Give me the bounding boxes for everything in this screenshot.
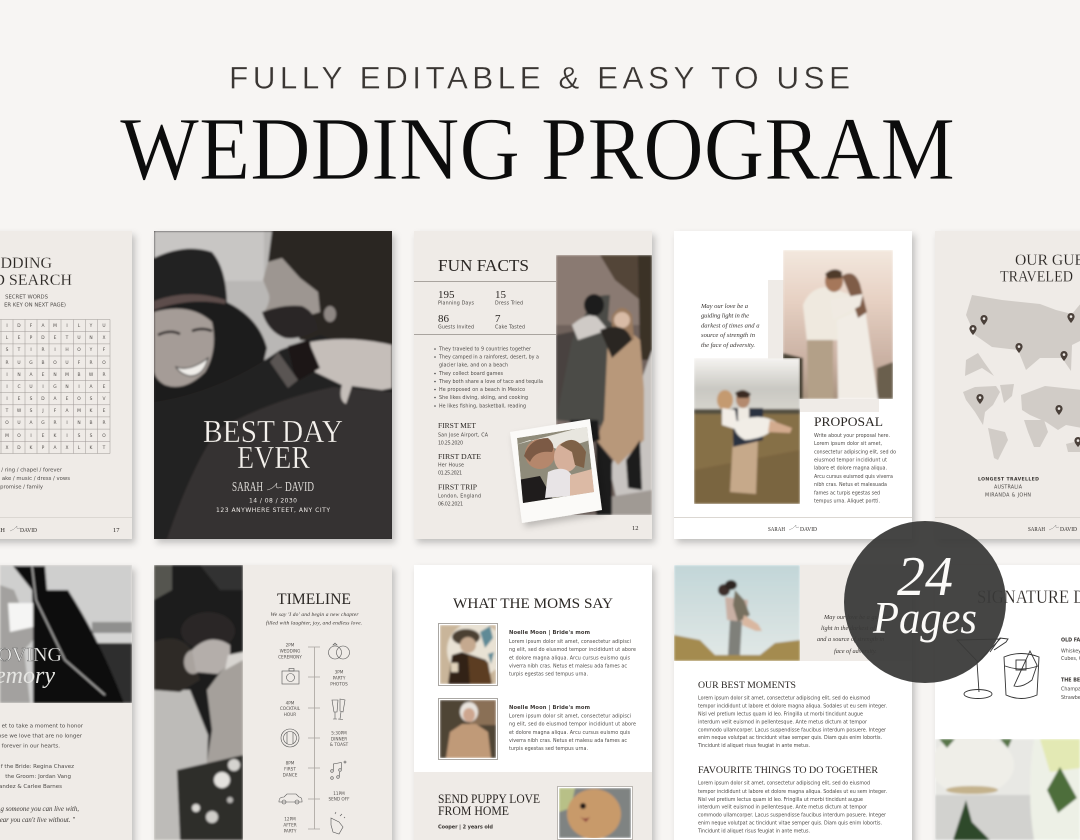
word search grid: O bbox=[77, 396, 81, 402]
couple photo bbox=[556, 255, 652, 515]
best moments text: Lorem ipsum dolor sit amet, consectetur adipiscing elit, sed do eiusmod bbox=[698, 696, 870, 702]
memorial title bbox=[0, 644, 62, 689]
word search grid: U bbox=[77, 335, 81, 341]
word search grid: U bbox=[29, 384, 33, 390]
word search grid: W bbox=[89, 372, 94, 378]
field couple photo bbox=[694, 358, 800, 504]
proposal text bbox=[814, 414, 896, 504]
word list: promise / family bbox=[0, 484, 43, 490]
word search grid: H bbox=[65, 347, 69, 353]
word search grid: E bbox=[42, 433, 45, 439]
best moments text: OUR BEST MOMENTS bbox=[698, 680, 796, 690]
stats: 195 bbox=[438, 289, 455, 301]
longest travelled text: LONGEST TRAVELLED bbox=[978, 476, 1039, 482]
fun facts heading: FUN FACTS bbox=[438, 256, 529, 275]
memorial text: ear you can't live without. " bbox=[0, 817, 75, 824]
favourite things text bbox=[697, 765, 887, 834]
header bbox=[120, 60, 955, 199]
proposal text: labore et dolore magna aliqua. bbox=[814, 466, 887, 472]
word search grid: E bbox=[103, 384, 106, 390]
mom photo 2 bbox=[438, 698, 498, 760]
word search grid: E bbox=[42, 372, 45, 378]
word search grid: I bbox=[6, 384, 8, 390]
quote: the face of adversity. bbox=[701, 342, 755, 349]
mom quote 1: et dolore magna aliqua. Arcu cursus euismo quis bbox=[509, 656, 630, 662]
quote: darkest of times and a bbox=[701, 322, 760, 330]
icon: martini glass bbox=[957, 638, 1008, 698]
word search grid: A bbox=[53, 445, 57, 451]
stats: 86 bbox=[438, 313, 450, 325]
word search grid: R bbox=[102, 420, 106, 426]
word search heading: SECRET WORDS bbox=[5, 294, 49, 300]
favourite things text: tempor incididunt ut labore et dolore magna aliqua. Sodales ut eu sem integer. bbox=[698, 789, 887, 795]
word search grid: F bbox=[103, 347, 106, 353]
longest travelled text bbox=[978, 476, 1039, 498]
timeline labels right: 5:30PM bbox=[331, 730, 347, 736]
timeline labels right: & TOAST bbox=[330, 742, 349, 747]
word search grid: O bbox=[102, 360, 106, 366]
panel: word search page bbox=[0, 231, 132, 539]
proposal text: fames ac turpis egestas sed bbox=[814, 490, 880, 496]
word search grid: U bbox=[17, 360, 21, 366]
word search grid: I bbox=[6, 396, 8, 402]
proposal text: PROPOSAL bbox=[814, 414, 883, 429]
proposal text: Write about your proposal here. bbox=[814, 433, 890, 439]
mom quote 2 bbox=[509, 705, 636, 752]
word search grid: I bbox=[66, 420, 68, 426]
panel: timeline page bbox=[154, 565, 392, 840]
footer: 17 bbox=[113, 527, 120, 534]
panel: proposal page bbox=[674, 231, 912, 539]
word search grid: X bbox=[102, 335, 106, 341]
word search grid: T bbox=[65, 335, 69, 341]
footer bbox=[0, 517, 132, 534]
first moments: 01.25.2021 bbox=[438, 470, 462, 476]
longest travelled text: MIRANDA & JOHN bbox=[985, 492, 1031, 498]
word search grid: P bbox=[42, 445, 45, 451]
couple jump photo bbox=[674, 565, 800, 661]
word search grid: X bbox=[5, 445, 9, 451]
word search grid: O bbox=[17, 433, 21, 439]
word search grid: M bbox=[5, 433, 9, 439]
word search grid: A bbox=[29, 420, 33, 426]
cover text: SARAH bbox=[232, 480, 263, 495]
timeline labels right: 3PM bbox=[335, 670, 344, 674]
footer bbox=[674, 517, 912, 533]
bullet list: They collect board games bbox=[438, 371, 504, 377]
timeline heading: filled with laughter, joy, and endless love. bbox=[266, 620, 362, 626]
timeline labels left: 4PM bbox=[286, 700, 295, 706]
word search grid: O bbox=[5, 420, 9, 426]
mom quote 1: Noelle Moon | Bride's mom bbox=[509, 630, 590, 636]
polaroid bbox=[510, 419, 602, 523]
footer: SARAH bbox=[768, 526, 785, 533]
bullet list: glacier lake, and on a beach bbox=[439, 362, 508, 368]
word search grid: A bbox=[41, 323, 45, 329]
memorial text: et to take a moment to honor bbox=[2, 724, 84, 730]
badge: 24 pages bbox=[844, 521, 1006, 683]
mom quote 2: et dolore magna aliqua. Arcu cursus euismo quis bbox=[509, 730, 630, 736]
word search grid: K bbox=[90, 445, 93, 451]
timeline heading: We say 'I do' and begin a new chapter bbox=[270, 612, 359, 618]
mom quote 2: viverra nibh cras. Netus et malesu ada fames ac bbox=[509, 738, 627, 744]
timeline labels left bbox=[278, 642, 302, 834]
word search grid: S bbox=[90, 433, 93, 439]
bullet list: He proposed on a beach in Mexico bbox=[439, 387, 525, 393]
word search grid: V bbox=[102, 396, 106, 402]
word search grid: N bbox=[17, 372, 21, 378]
mom quote 2: turpis egestas sed tempus urna. bbox=[509, 746, 588, 752]
stats: Cake Tasted bbox=[495, 324, 525, 330]
word search grid: I bbox=[66, 323, 68, 329]
memorial text: the Groom: Jordan Vang bbox=[5, 774, 71, 780]
mom quote 2: Lorem ipsum dolor sit amet, consectetur adipisci bbox=[509, 714, 631, 720]
beige panel quote: and a source of strength in bbox=[817, 636, 884, 643]
word search grid: W bbox=[17, 408, 22, 414]
first moments bbox=[438, 421, 489, 508]
page number: 12 bbox=[632, 525, 638, 532]
mom quote 2: Noelle Moon | Bride's mom bbox=[509, 705, 590, 711]
stats: 15 bbox=[495, 289, 506, 301]
word search grid: X bbox=[65, 445, 69, 451]
best moments text: Tincidunt id aliquet risus feugiat in ante metus. bbox=[697, 743, 810, 749]
panel: best moments page bbox=[674, 565, 912, 840]
first moments: FIRST DATE bbox=[438, 452, 481, 461]
word search grid: N bbox=[53, 372, 57, 378]
best moments text: enim neque volutpat ac tincidunt vitae semper quis. Diam quis enim lobortis. bbox=[698, 735, 882, 741]
timeline labels right: PHOTOS bbox=[330, 682, 348, 686]
proposal text: consectetur adipiscing elit, sed do bbox=[814, 450, 896, 456]
beige panel quote: light in the darkest of bbox=[821, 625, 876, 632]
icon: camera bbox=[282, 668, 299, 684]
word search grid: D bbox=[17, 323, 21, 329]
word search grid: T bbox=[5, 408, 9, 414]
badge: 24 pages: 24 bbox=[897, 546, 953, 608]
word list: ake / music / dress / vows bbox=[2, 476, 70, 482]
quote: May our love be a bbox=[700, 303, 749, 310]
icon: whiskey glass bbox=[1004, 651, 1039, 698]
word search grid: E bbox=[54, 335, 57, 341]
quote: source of strength in bbox=[701, 332, 756, 339]
panel: fun facts page bbox=[414, 231, 652, 539]
timeline labels right: SEND OFF bbox=[328, 796, 350, 802]
timeline labels left: 12PM bbox=[284, 816, 296, 822]
panel: in loving memory page bbox=[0, 565, 132, 840]
word search grid: N bbox=[77, 420, 81, 426]
word search grid: D bbox=[17, 445, 21, 451]
beige panel quote bbox=[817, 614, 891, 655]
word search grid: B bbox=[77, 372, 81, 378]
timeline labels left: AFTER bbox=[283, 822, 297, 828]
drink descriptions bbox=[1061, 638, 1080, 701]
cover text: EVER bbox=[237, 439, 311, 475]
word search grid: R bbox=[41, 347, 45, 353]
word search grid: B bbox=[41, 360, 45, 366]
mom quote 1 bbox=[509, 630, 636, 678]
mom quote 1: Lorem ipsum dolor sit amet, consectetur adipisci bbox=[509, 639, 631, 645]
timeline labels left: 2PM bbox=[286, 642, 295, 648]
word search grid: S bbox=[78, 433, 81, 439]
word search grid: I bbox=[42, 384, 44, 390]
footer: DAVID bbox=[20, 527, 37, 534]
word search grid: O bbox=[102, 433, 106, 439]
proposal text: Arcu cursus euismod quis viverra bbox=[814, 474, 893, 480]
word search grid: D bbox=[41, 335, 45, 341]
word search grid: C bbox=[17, 384, 21, 390]
panel: signature drinks page bbox=[930, 565, 1080, 840]
cocktail photo bbox=[930, 735, 1080, 840]
sunset couple photo bbox=[783, 250, 893, 399]
word search grid: G bbox=[41, 420, 45, 426]
memorial text: f the Bride: Regina Chavez bbox=[1, 764, 74, 770]
first moments: London, England bbox=[438, 494, 481, 500]
word search grid: K bbox=[54, 433, 57, 439]
timeline labels left: FIRST bbox=[284, 766, 296, 772]
guests heading: TRAVELED bbox=[1000, 268, 1073, 286]
word search grid: R bbox=[5, 360, 9, 366]
panel: cover page Best Day Ever bbox=[154, 231, 392, 539]
beige panel quote: May our love be a guiding bbox=[823, 614, 891, 621]
best moments text: commodo ullamcorper. Lacus suspendisse faucibus interdum posuere. Integer bbox=[698, 728, 886, 734]
word search grid: K bbox=[90, 408, 93, 414]
longest travelled text: AUSTRALIA bbox=[994, 484, 1023, 490]
timeline labels right: DINNER bbox=[331, 736, 347, 742]
word search grid: J bbox=[41, 408, 44, 414]
word search grid: F bbox=[30, 323, 33, 329]
first moments: Her House bbox=[438, 462, 464, 468]
word search grid: S bbox=[90, 396, 93, 402]
map: world bbox=[963, 384, 1080, 460]
quote bbox=[700, 303, 760, 349]
favourite things text: Nisl vel pretium lectus quam id leo. Fringilla ut morbi tincidunt augue bbox=[698, 797, 863, 803]
best moments text bbox=[697, 680, 887, 749]
word search grid: D bbox=[41, 396, 45, 402]
word search grid: Y bbox=[89, 323, 93, 329]
subtitle: FULLY EDITABLE & EASY TO USE bbox=[229, 60, 850, 96]
word search grid: T bbox=[102, 445, 106, 451]
bullet list: He likes fishing, basketball, reading bbox=[439, 404, 526, 410]
stats: 7 bbox=[495, 313, 501, 325]
word list: / ring / chapel / forever bbox=[1, 468, 63, 474]
timeline labels left: PARTY bbox=[284, 828, 297, 834]
badge: 24 pages: Pages bbox=[872, 592, 977, 643]
map pins bbox=[969, 313, 1080, 447]
word list bbox=[0, 468, 70, 490]
icon: confetti bottle bbox=[331, 812, 345, 834]
map: united states bbox=[965, 295, 1080, 376]
timeline labels left: WEDDING bbox=[280, 648, 300, 654]
panel: guests traveled page bbox=[935, 231, 1080, 539]
word search grid: I bbox=[66, 433, 68, 439]
cover text: BEST DAY bbox=[203, 413, 343, 449]
timeline labels right: 11PM bbox=[333, 791, 345, 796]
puppy section: Cooper | 2 years old bbox=[438, 824, 493, 830]
word search grid: E bbox=[66, 396, 69, 402]
first moments: 10.25.2020 bbox=[438, 440, 463, 446]
icon: music notes bbox=[331, 761, 346, 779]
stats: Guests Invited bbox=[438, 324, 474, 330]
word search grid: R bbox=[53, 420, 57, 426]
timeline labels left: COCKTAIL bbox=[280, 706, 301, 711]
memorial text bbox=[0, 724, 84, 824]
word search grid: U bbox=[17, 420, 21, 426]
puppy section: SEND PUPPY LOVE bbox=[438, 792, 540, 806]
word search grid: O bbox=[53, 360, 57, 366]
footer bbox=[935, 517, 1080, 533]
cover text bbox=[203, 413, 343, 514]
footer: SARAH bbox=[1028, 526, 1045, 533]
footer: DAVID bbox=[800, 526, 817, 533]
bullet list: She likes diving, skiing, and cooking bbox=[439, 395, 528, 401]
word search grid: K bbox=[30, 445, 33, 451]
bullet list: They traveled to 9 countries together bbox=[438, 346, 531, 352]
word search grid: A bbox=[89, 384, 93, 390]
word search grid: S bbox=[6, 347, 9, 353]
puppy section: FROM HOME bbox=[438, 804, 509, 818]
word search grid: Y bbox=[89, 347, 93, 353]
timeline labels left: CEREMONY bbox=[278, 654, 302, 660]
best moments text: interdum velit euismod in pellentesque. Ante metus dictum at tempor bbox=[698, 720, 867, 726]
timeline heading bbox=[266, 591, 362, 626]
beige panel quote: face of adversity. bbox=[834, 648, 877, 655]
word search grid: L bbox=[6, 335, 9, 341]
word search grid: B bbox=[89, 420, 93, 426]
word search grid: I bbox=[54, 347, 56, 353]
puppy section bbox=[414, 772, 652, 840]
word search grid: S bbox=[30, 396, 33, 402]
bullet list: They both share a love of taco and tequila bbox=[438, 379, 543, 385]
favourite things text: Tincidunt id aliquet risus feugiat in ante metus. bbox=[697, 828, 810, 834]
word search grid: E bbox=[103, 408, 106, 414]
word search grid: U bbox=[102, 323, 106, 329]
word search grid: L bbox=[78, 323, 81, 329]
wedding couple photo bbox=[154, 565, 243, 840]
word search heading bbox=[0, 255, 72, 308]
cover photo bbox=[154, 231, 392, 539]
panel: what the moms say page bbox=[414, 565, 652, 840]
favourite things text: FAVOURITE THINGS TO DO TOGETHER bbox=[698, 765, 878, 775]
best moments text: tempor incididunt ut labore et dolore magna aliqua. Sodales ut eu sem integer. bbox=[698, 704, 887, 710]
word search grid: A bbox=[53, 396, 57, 402]
word search grid: N bbox=[89, 335, 93, 341]
memorial text: ose we love that are no longer bbox=[0, 734, 83, 740]
word search grid: L bbox=[78, 445, 81, 451]
first moments: FIRST TRIP bbox=[438, 482, 478, 492]
moms heading: WHAT THE MOMS SAY bbox=[453, 596, 614, 612]
beige accent blocks bbox=[768, 280, 879, 412]
word search grid: R bbox=[89, 360, 93, 366]
timeline labels right bbox=[328, 670, 350, 802]
word search grid: F bbox=[54, 408, 57, 414]
mom quote 2: ng elit, sed do eiusmod tempor incididunt ut abore bbox=[509, 722, 636, 728]
word search grid: A bbox=[29, 372, 33, 378]
timeline labels left: 8PM bbox=[286, 760, 295, 766]
cover text: DAVID bbox=[285, 480, 314, 495]
word search grid: I bbox=[6, 323, 8, 329]
word search grid: M bbox=[65, 372, 69, 378]
first moments: 06.02.2021 bbox=[438, 502, 463, 508]
timeline labels left: DANCE bbox=[283, 772, 298, 778]
footer: DAVID bbox=[1060, 526, 1077, 533]
proposal text: Lorem ipsum dolor sit amet, bbox=[814, 441, 882, 447]
word search grid: I bbox=[6, 372, 8, 378]
mom quote 1: turpis egestas sed tempus urna. bbox=[509, 672, 588, 678]
memorial photo bbox=[0, 565, 132, 703]
word search grid: S bbox=[30, 408, 33, 414]
word search grid: G bbox=[53, 384, 57, 390]
puppy photo bbox=[559, 788, 631, 839]
stats bbox=[414, 281, 556, 335]
cover text: 123 ANYWHERE STEET, ANY CITY bbox=[216, 507, 330, 514]
word search grid: E bbox=[18, 396, 21, 402]
word search grid: I bbox=[30, 433, 32, 439]
word search grid: G bbox=[29, 360, 33, 366]
mom photo 1 bbox=[438, 622, 503, 686]
favourite things text: Lorem ipsum dolor sit amet, consectetur adipiscing elit, sed do eiusmod bbox=[698, 780, 870, 786]
word search grid: M bbox=[53, 323, 57, 329]
bullet list bbox=[434, 346, 543, 410]
word search grid: U bbox=[65, 360, 69, 366]
word search grid: N bbox=[65, 384, 69, 390]
icon: rings bbox=[328, 643, 350, 659]
cover text: 14 / 08 / 2030 bbox=[249, 498, 297, 504]
proposal text: eiusmod tempor incididunt ut bbox=[814, 458, 887, 464]
word search grid: P bbox=[30, 335, 33, 341]
word search grid: A bbox=[65, 408, 69, 414]
word search grid: M bbox=[77, 408, 81, 414]
word search grid: E bbox=[18, 335, 21, 341]
guests heading bbox=[1000, 252, 1080, 286]
bullet list: They camped in a rainforest, desert, by a bbox=[438, 354, 539, 360]
proposal text: nibh cras. Netus et malesuada bbox=[814, 482, 887, 488]
stats: Planning Days bbox=[438, 300, 474, 306]
word search grid: O bbox=[77, 347, 81, 353]
timeline labels left: HOUR bbox=[284, 712, 296, 717]
memorial text: andez & Carlee Barnes bbox=[0, 784, 62, 790]
icon: plate and cutlery bbox=[281, 729, 299, 747]
memorial text: g someone you can live with, bbox=[0, 806, 79, 813]
word search grid: R bbox=[102, 372, 106, 378]
word search grid: F bbox=[78, 360, 81, 366]
mom quote 1: viverra nibh cras. Netus et malesu ada fames ac bbox=[509, 664, 627, 670]
word search grid: T bbox=[17, 347, 21, 353]
timeline axis bbox=[308, 647, 320, 829]
memorial text: forever in our hearts. bbox=[2, 744, 60, 750]
best moments text: Nisl vel pretium lectus quam id leo. Fringilla ut morbi tincidunt augue bbox=[698, 712, 863, 718]
favourite things text: interdum velit euismod in pellentesque. Ante metus dictum at tempor bbox=[698, 804, 867, 810]
word search grid: I bbox=[78, 384, 80, 390]
first moments: FIRST MET bbox=[438, 421, 476, 430]
icon: car bbox=[279, 794, 302, 804]
first moments: San Jose Airport, CA bbox=[438, 432, 489, 438]
timeline heading: TIMELINE bbox=[277, 591, 351, 608]
favourite things text: commodo ullamcorper. Lacus suspendisse faucibus interdum posuere. Integer bbox=[698, 812, 886, 818]
word search heading: ER KEY ON NEXT PAGE) bbox=[4, 302, 66, 308]
word search grid bbox=[0, 320, 110, 454]
icon: champagne glasses bbox=[332, 699, 345, 720]
timeline labels right: PARTY bbox=[333, 676, 346, 680]
favourite things text: enim neque volutpat ac tincidunt vitae semper quis. Diam quis enim lobortis. bbox=[698, 820, 882, 826]
proposal text: tempus urna. Aliquet portti. bbox=[814, 498, 880, 504]
stats: Dress Tried bbox=[495, 300, 523, 306]
word search heading: DDING bbox=[0, 255, 52, 272]
main title: WEDDING PROGRAM bbox=[120, 100, 955, 199]
quote: guiding light in the bbox=[701, 312, 749, 320]
mom quote 1: ng elit, sed do eiusmod tempor incididunt ut abore bbox=[509, 647, 636, 653]
word search grid: I bbox=[30, 347, 32, 353]
